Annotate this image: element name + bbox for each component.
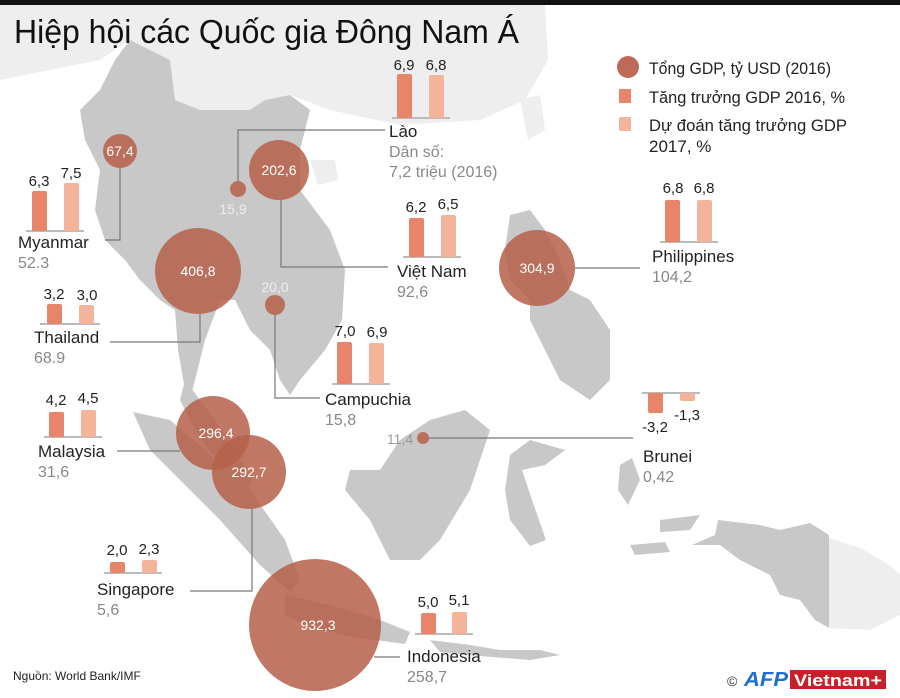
country labels: Campuchia xyxy=(325,390,412,409)
circle values: 202,6 xyxy=(261,162,297,178)
top black bar xyxy=(0,0,900,5)
country labels: 31,6 xyxy=(38,464,69,481)
country labels: Singapore xyxy=(97,580,175,599)
bars: Vietnam: 6,2 xyxy=(406,199,426,216)
GDP circles xyxy=(103,134,575,691)
country labels: Dân số: xyxy=(389,144,444,161)
bars: Malaysia: 4,2 xyxy=(46,392,66,409)
country labels: Việt Nam xyxy=(397,262,467,281)
bars: Cambodia xyxy=(332,323,390,384)
circle values: 406,8 xyxy=(180,263,216,279)
bars: Thailand: 3,2 xyxy=(44,286,64,303)
bars: Indonesia xyxy=(415,592,473,634)
circle values: 20,0 xyxy=(261,279,289,295)
legend: 2017, % xyxy=(649,137,711,156)
bars: Malaysia xyxy=(44,390,102,437)
country labels: 104,2 xyxy=(652,269,692,286)
circle values xyxy=(106,143,555,633)
logo: Vietnam+ xyxy=(794,671,882,690)
circle values: 292,7 xyxy=(231,464,267,480)
country labels: Indonesia xyxy=(407,647,481,666)
country labels: Philippines xyxy=(652,247,734,266)
bars: Myanmar: 7,5 xyxy=(61,165,81,182)
circle values: 932,3 xyxy=(300,617,336,633)
country labels: 15,8 xyxy=(325,412,356,429)
bars: Brunei: -3,2 xyxy=(642,419,668,436)
country labels: 68.9 xyxy=(34,350,65,367)
leader lines xyxy=(105,130,640,657)
circle values: 304,9 xyxy=(519,260,555,276)
bars: Singapore xyxy=(104,541,162,573)
country labels: 5,6 xyxy=(97,602,119,619)
logo xyxy=(727,669,886,691)
circle values: 15,9 xyxy=(219,201,247,217)
country labels: Brunei xyxy=(643,447,692,466)
logo: © xyxy=(727,673,738,689)
bars: Thailand xyxy=(40,286,100,324)
bars: Philippines: 6,8 xyxy=(663,180,683,197)
circle values: 11,4 xyxy=(387,431,413,447)
map: gray land masses xyxy=(80,40,829,660)
bars: Indonesia: 5,1 xyxy=(449,592,469,609)
bars: Cambodia: 7,0 xyxy=(335,323,355,340)
bars: Indonesia: 5,0 xyxy=(418,594,438,611)
country labels: Malaysia xyxy=(38,442,106,461)
country labels: 0,42 xyxy=(643,469,674,486)
country labels: Thailand xyxy=(34,328,99,347)
bars: Laos xyxy=(392,57,450,118)
circle values: 296,4 xyxy=(198,425,234,441)
country labels: Lào xyxy=(389,122,417,141)
country labels: 258,7 xyxy=(407,669,447,686)
bars: Singapore: 2,0 xyxy=(107,542,127,559)
source: Nguồn: World Bank/IMF xyxy=(13,669,141,683)
bars: Thailand: 3,0 xyxy=(77,287,97,304)
country labels xyxy=(18,122,734,686)
country labels: 52.3 xyxy=(18,255,49,272)
bars: Myanmar: 6,3 xyxy=(29,173,49,190)
country labels: 7,2 triệu (2016) xyxy=(389,164,498,181)
bars: Brunei xyxy=(642,393,700,436)
country labels: Myanmar xyxy=(18,233,89,252)
title: Hiệp hội các Quốc gia Đông Nam Á xyxy=(14,13,519,50)
bars: Malaysia: 4,5 xyxy=(78,390,98,407)
logo: AFP xyxy=(743,669,789,691)
bars: Laos: 6,8 xyxy=(426,57,446,74)
bars: Laos: 6,9 xyxy=(394,57,414,74)
legend xyxy=(617,56,847,156)
bars: Philippines: 6,8 xyxy=(694,180,714,197)
bars: Myanmar xyxy=(26,165,84,231)
legend: Dự đoán tăng trưởng GDP xyxy=(649,116,847,135)
bars: Cambodia: 6,9 xyxy=(367,324,387,341)
country labels: 92,6 xyxy=(397,284,428,301)
circle values: 67,4 xyxy=(106,143,134,159)
bars: Vietnam: 6,5 xyxy=(438,196,458,213)
legend: Tăng trưởng GDP 2016, % xyxy=(649,88,845,107)
legend: Tổng GDP, tỷ USD (2016) xyxy=(649,59,831,78)
bars: Philippines xyxy=(660,180,718,242)
bars: Brunei: -1,3 xyxy=(674,407,700,424)
bars: Singapore: 2,3 xyxy=(139,541,159,558)
bars: Vietnam xyxy=(403,196,461,257)
